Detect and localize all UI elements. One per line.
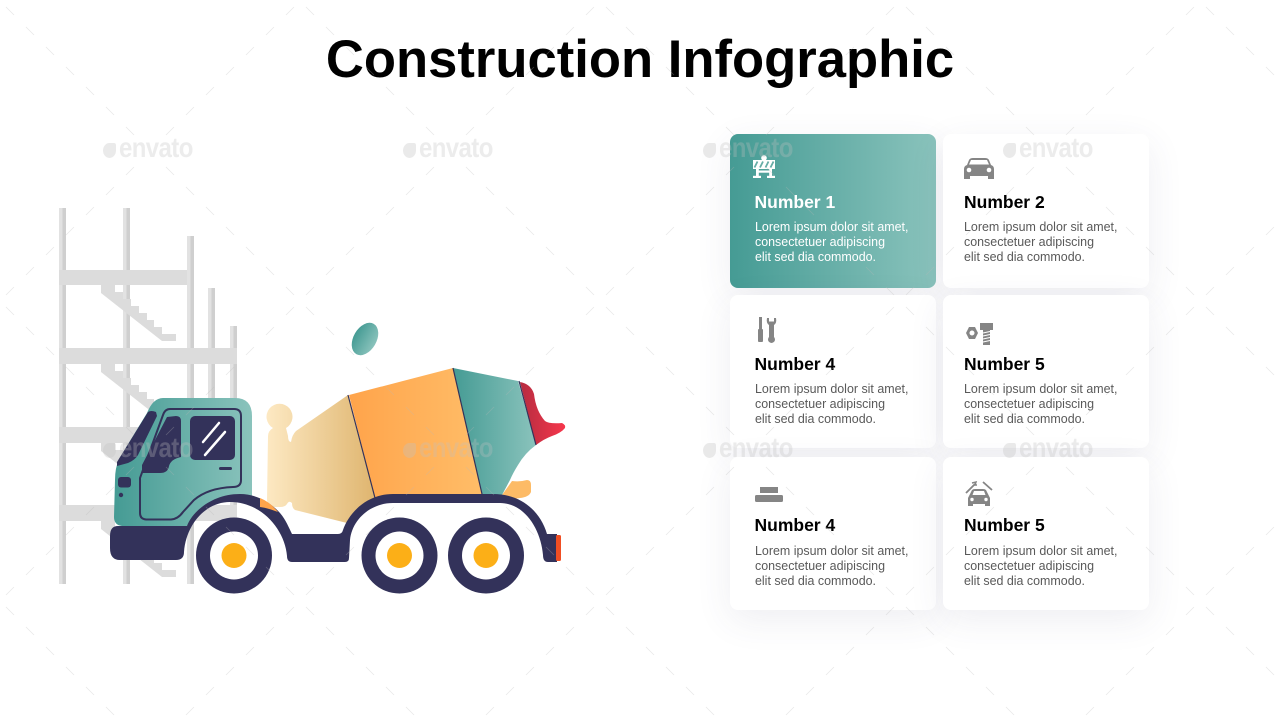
text block: Lorem ipsum dolor sit amet, xyxy=(755,382,908,396)
front window xyxy=(190,416,235,460)
mixer drum xyxy=(266,368,565,523)
watermark: envato xyxy=(119,133,193,164)
text block: Lorem ipsum dolor sit amet, xyxy=(964,544,1117,558)
text block: elit sed dia commodo. xyxy=(964,574,1085,588)
windshield xyxy=(117,411,157,466)
text block: Lorem ipsum dolor sit amet, xyxy=(755,220,908,234)
text block: elit sed dia commodo. xyxy=(755,574,876,588)
drum nose xyxy=(520,382,565,445)
panel: card 6 xyxy=(943,457,1149,610)
title: Construction Infographic xyxy=(326,30,954,89)
front wheel xyxy=(196,518,272,594)
text block: consectetuer adipiscing xyxy=(755,235,885,249)
panel: card 3 xyxy=(730,295,936,448)
icon: car service xyxy=(966,481,992,506)
door handle xyxy=(219,467,232,470)
drum front section xyxy=(453,368,536,495)
watermark: envato xyxy=(1019,433,1093,464)
text block: consectetuer adipiscing xyxy=(755,559,885,573)
text block: Lorem ipsum dolor sit amet, xyxy=(964,382,1117,396)
icon: car xyxy=(964,158,994,179)
illustration: scaffolding and cement mixer truck xyxy=(59,208,566,594)
text block: consectetuer adipiscing xyxy=(964,235,1094,249)
text block: Lorem ipsum dolor sit amet, xyxy=(755,544,908,558)
cab xyxy=(114,398,252,526)
heading: Number 5 xyxy=(964,354,1045,374)
heading: Number 2 xyxy=(964,192,1045,212)
text block: consectetuer adipiscing xyxy=(755,397,885,411)
watermark: envato xyxy=(119,433,193,464)
text block xyxy=(964,382,1117,426)
text block: elit sed dia commodo. xyxy=(755,250,876,264)
text block xyxy=(755,544,908,588)
text block: consectetuer adipiscing xyxy=(964,559,1094,573)
fender light xyxy=(260,498,278,512)
text block xyxy=(755,382,908,426)
panel: card 1 xyxy=(730,134,936,288)
text block xyxy=(755,220,908,264)
text block xyxy=(964,544,1117,588)
text block: consectetuer adipiscing xyxy=(964,397,1094,411)
icon: stacked blocks xyxy=(755,487,783,502)
heading: Number 4 xyxy=(754,354,835,374)
rear wheel one xyxy=(362,518,438,594)
drum middle section xyxy=(349,368,482,498)
heading: Number 1 xyxy=(754,192,835,212)
door outline xyxy=(140,409,241,520)
text block: elit sed dia commodo. xyxy=(755,412,876,426)
icon: road barrier xyxy=(753,155,775,178)
watermark: envato xyxy=(719,133,793,164)
watermark: envato xyxy=(1019,133,1093,164)
side window xyxy=(142,416,181,473)
heading: Number 4 xyxy=(754,514,835,534)
icon: screwdriver and wrench xyxy=(758,317,776,343)
panel: card 4 xyxy=(943,295,1149,448)
panel: card 5 xyxy=(730,457,936,610)
text block xyxy=(964,220,1117,264)
panel: card 2 xyxy=(943,134,1149,288)
tail light xyxy=(556,535,561,561)
headlight xyxy=(118,477,131,488)
watermark: envato xyxy=(419,133,493,164)
text block: Lorem ipsum dolor sit amet, xyxy=(964,220,1117,234)
icon: nut and bolt xyxy=(966,323,993,345)
watermark: envato xyxy=(419,433,493,464)
discharge chute xyxy=(502,480,531,499)
chassis and fenders xyxy=(110,494,561,562)
heading: Number 5 xyxy=(964,514,1045,534)
text block: elit sed dia commodo. xyxy=(964,412,1085,426)
icon: cement drop xyxy=(346,318,384,360)
drum rear section xyxy=(266,395,375,523)
watermark: envato xyxy=(719,433,793,464)
text block: elit sed dia commodo. xyxy=(964,250,1085,264)
scaffolding xyxy=(59,208,237,584)
rear wheel two xyxy=(448,518,524,594)
